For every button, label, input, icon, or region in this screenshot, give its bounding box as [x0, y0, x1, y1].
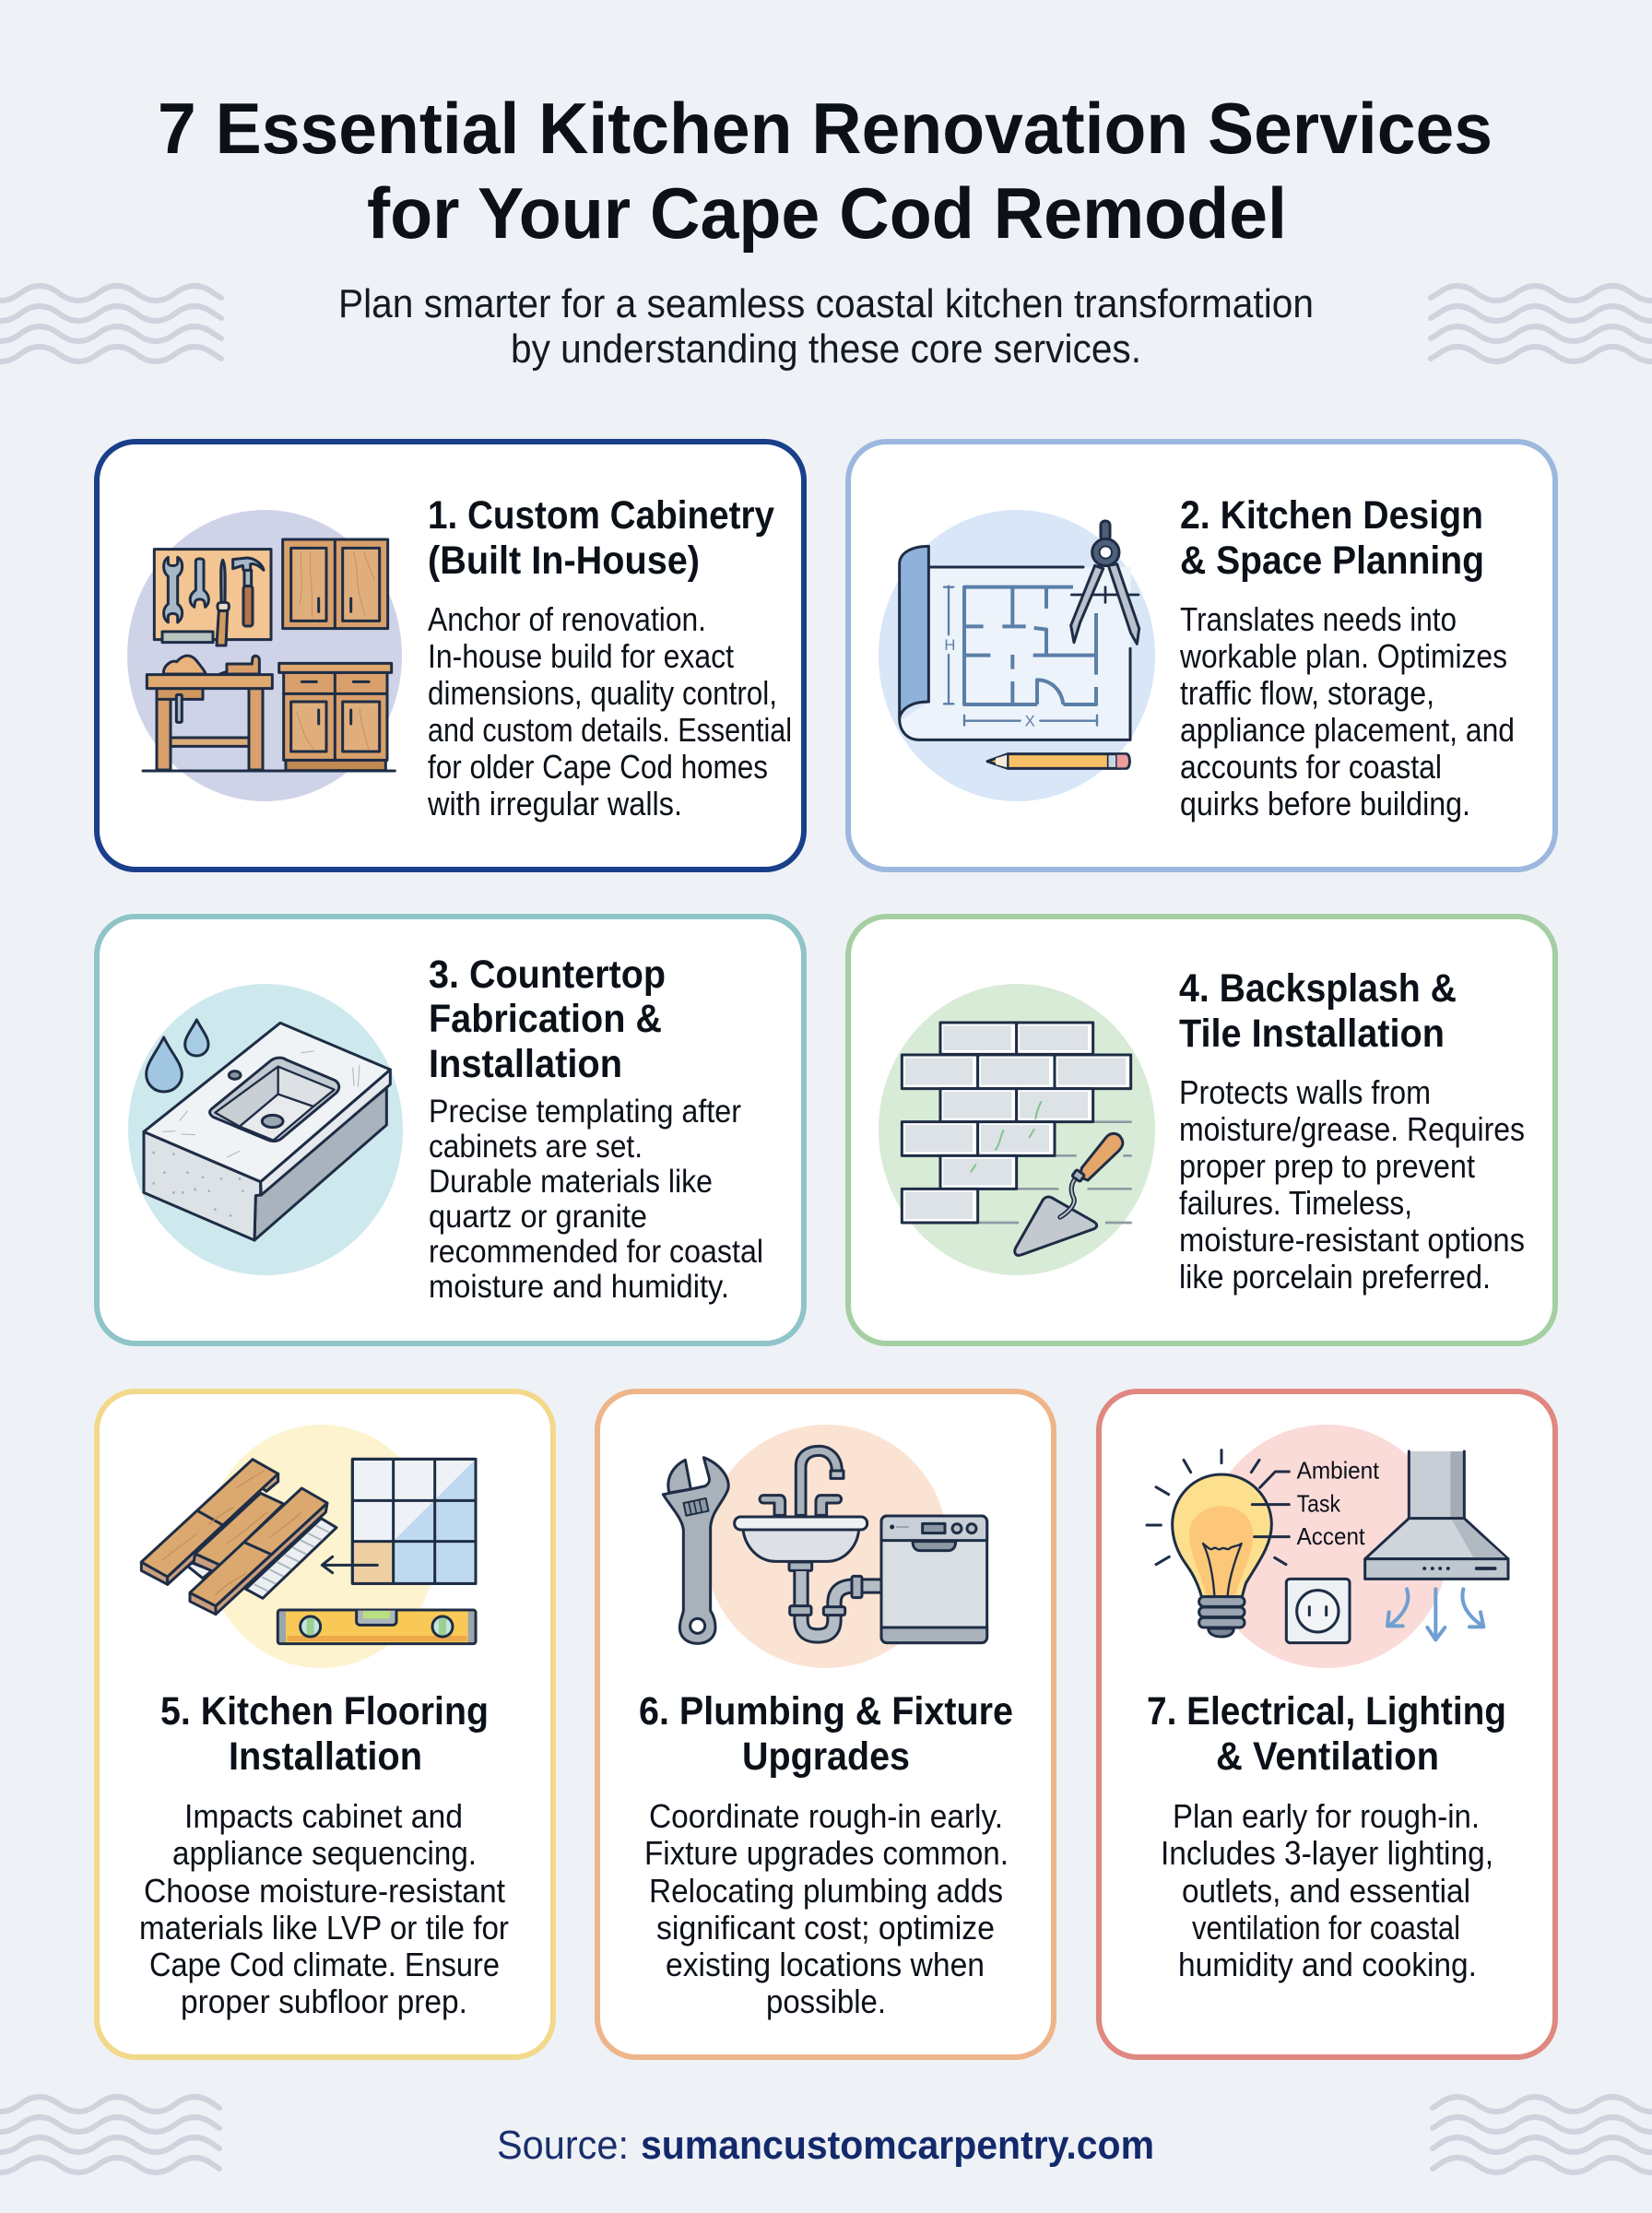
text block: In-house build for exact	[428, 637, 734, 675]
text block	[427, 600, 792, 822]
text block: Fixture upgrades common.	[644, 1834, 1009, 1872]
source line: sumancustomcarpentry.com	[641, 2123, 1154, 2168]
text block: failures. Timeless,	[1179, 1184, 1412, 1222]
text block: significant cost; optimize	[656, 1909, 995, 1947]
text block: like porcelain preferred.	[1179, 1258, 1491, 1296]
source line: Source:	[497, 2123, 629, 2168]
text block: and custom details. Essential	[428, 711, 792, 749]
heading	[428, 493, 774, 583]
text block: Choose moisture-resistant	[144, 1872, 505, 1910]
text block: cabinets are set.	[429, 1129, 643, 1165]
text block: quirks before building.	[1180, 785, 1470, 822]
heading: 5. Kitchen Flooring	[160, 1689, 489, 1734]
text block: quartz or granite	[429, 1199, 647, 1235]
text block	[429, 1094, 763, 1305]
icon: tile wall and trowel	[879, 984, 1155, 1275]
panel: countertop	[97, 917, 804, 1343]
subtitle: by understanding these core services.	[511, 326, 1141, 372]
text block: proper subfloor prep.	[181, 1982, 467, 2020]
text block: dimensions, quality control,	[428, 674, 777, 712]
text block	[1179, 600, 1515, 822]
text block: Translates needs into	[1180, 600, 1457, 638]
text block: humidity and cooking.	[1178, 1946, 1477, 1983]
heading: (Built In-House)	[428, 538, 700, 583]
subtitle: Plan smarter for a seamless coastal kitchen transformation	[338, 281, 1314, 326]
text block: Cape Cod climate. Ensure	[149, 1946, 500, 1983]
icon: wood planks, tile and level	[141, 1425, 476, 1668]
text block: possible.	[766, 1982, 886, 2020]
text block: Plan early for rough-in.	[1173, 1797, 1480, 1835]
heading	[160, 1689, 489, 1779]
text block: ventilation for coastal	[1192, 1909, 1460, 1947]
text block	[1161, 1797, 1493, 1983]
heading	[639, 1689, 1013, 1779]
text block: Coordinate rough-in early.	[649, 1797, 1003, 1835]
icon: bulb, outlet and hood: Task	[1297, 1489, 1341, 1517]
text block: recommended for coastal	[429, 1234, 763, 1270]
text block: Includes 3-layer lighting,	[1161, 1834, 1493, 1872]
text block: moisture and humidity.	[429, 1269, 729, 1305]
heading: Fabrication &	[429, 997, 662, 1041]
heading: & Space Planning	[1180, 538, 1484, 583]
icon: bulb, outlet and hood: Accent	[1297, 1522, 1365, 1550]
icon: blueprint and compass	[879, 510, 1155, 801]
icon: workshop and cabinets	[127, 510, 402, 801]
heading: 3. Countertop	[429, 953, 666, 997]
heading: 7. Electrical, Lighting	[1147, 1689, 1506, 1734]
heading: 1. Custom Cabinetry	[428, 493, 774, 538]
text block	[644, 1797, 1009, 2020]
title	[158, 88, 1493, 254]
text block: moisture/grease. Requires	[1179, 1110, 1525, 1148]
icon: blueprint and compass: H	[944, 636, 955, 654]
heading: 4. Backsplash &	[1179, 966, 1457, 1011]
panel: flooring	[97, 1391, 553, 2057]
text block: Impacts cabinet and	[184, 1797, 463, 1835]
text block: outlets, and essential	[1182, 1872, 1470, 1910]
heading: & Ventilation	[1216, 1734, 1439, 1779]
heading: 2. Kitchen Design	[1180, 493, 1483, 538]
text block: accounts for coastal	[1180, 748, 1442, 786]
subtitle	[338, 281, 1314, 372]
heading: Installation	[429, 1042, 622, 1086]
title: 7 Essential Kitchen Renovation Services	[158, 88, 1493, 169]
text block: Durable materials like	[429, 1164, 713, 1200]
heading	[1147, 1689, 1506, 1779]
text block: Anchor of renovation.	[428, 600, 706, 638]
text block: appliance placement, and	[1180, 711, 1515, 749]
heading: Tile Installation	[1179, 1012, 1445, 1056]
text block	[139, 1797, 509, 2020]
heading	[1179, 966, 1457, 1056]
heading	[1180, 493, 1484, 583]
text block: traffic flow, storage,	[1180, 674, 1434, 712]
icon: bulb, outlet and hood	[1147, 1425, 1508, 1668]
text block: for older Cape Cod homes	[428, 748, 768, 786]
heading: 6. Plumbing & Fixture	[639, 1689, 1013, 1734]
text block: workable plan. Optimizes	[1179, 637, 1507, 675]
text block: existing locations when	[666, 1946, 985, 1983]
panel: kitchen design	[848, 442, 1555, 870]
text block: Protects walls from	[1179, 1073, 1431, 1111]
text block: with irregular walls.	[427, 785, 682, 822]
panel: custom cabinetry	[97, 442, 804, 870]
icon: bulb, outlet and hood: Ambient	[1297, 1456, 1380, 1484]
text block: materials like LVP or tile for	[139, 1909, 509, 1947]
icon: blueprint and compass: X	[1025, 712, 1035, 729]
panel: backsplash	[848, 917, 1555, 1343]
icon: countertop with sink	[128, 984, 403, 1275]
title: for Your Cape Cod Remodel	[367, 172, 1287, 254]
text block: moisture-resistant options	[1179, 1221, 1525, 1259]
panel: electrical	[1099, 1391, 1555, 2057]
text block: appliance sequencing.	[172, 1834, 477, 1872]
text block: Relocating plumbing adds	[649, 1872, 1003, 1910]
heading	[429, 953, 666, 1086]
heading: Upgrades	[742, 1734, 910, 1779]
icon: wrench, sink and dishwasher	[663, 1425, 987, 1668]
panel: plumbing	[597, 1391, 1054, 2057]
heading: Installation	[229, 1734, 422, 1779]
text block: Precise templating after	[429, 1094, 741, 1130]
text block: proper prep to prevent	[1179, 1147, 1475, 1185]
text block	[1179, 1073, 1525, 1296]
